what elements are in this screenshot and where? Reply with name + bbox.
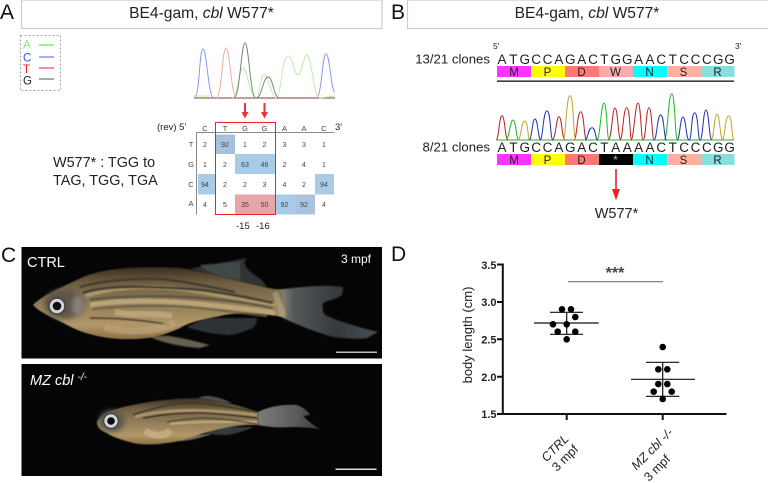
sequence: mutant clones: A [611,140,620,155]
chromatogram: panel A [194,43,335,98]
base editing table: 2 [223,162,227,169]
sequence: wild type clones: R [713,67,722,79]
base editing table: 35 [241,202,249,209]
sequence: mutant clones: P [544,155,552,167]
base editing table: 4 [203,202,207,209]
base editing table: G [242,124,248,133]
base editing table: 2 [223,182,227,189]
arrows: edited bases [242,103,268,118]
base editing table: T [189,140,194,149]
head and eye [99,410,125,432]
base editing table: 3 [263,182,267,189]
sequence: mutant clones: G [724,140,735,155]
label: MZ cbl -/-: -/- [78,372,88,383]
base editing table: 94 [320,182,328,189]
label B: B [391,1,405,24]
sequence: wild type clones: T [669,52,677,67]
sequence: wild type clones: G [611,52,621,67]
sequence: mutant clones: C [679,140,689,155]
sequence: mutant clones: A [645,140,655,155]
base editing table: A [301,124,307,133]
sequence: wild type clones: G [565,52,576,67]
sequence: mutant clones: C [656,140,666,155]
sequence: mutant clones: C [531,140,541,155]
base editing table: 3 [283,142,287,149]
base editing table: 46 [261,162,268,169]
sequence: mutant clones: A [554,140,563,155]
body [97,398,258,444]
sequence: wild type clones: C [656,52,666,67]
sequence: mutant clones: M [509,155,519,167]
y tick labels [481,260,496,421]
header: panel B [408,0,768,28]
sequence: wild type clones: A [645,52,655,67]
y axis title: body length (cm) [460,287,475,383]
axes [497,264,726,420]
base editing table: 1 [322,162,326,169]
stripes [133,403,257,435]
base editing table: 1 [203,162,207,169]
base editing table: 2 [243,182,247,189]
base editing table: 4 [283,182,287,189]
sequence: mutant clones: A [634,140,643,155]
header: panel A: BE4-gam, cbl W577* [129,5,274,22]
y tick labels: 3.5 [481,260,496,272]
sequence: mutant clones: C [691,140,701,155]
sequence: wild type clones: 5' [493,41,500,51]
sequence: wild type clones: C [702,52,712,67]
sequence: wild type clones: N [645,67,654,79]
x labels: 3 mpf [549,442,582,474]
sequence: wild type clones: A [554,52,563,67]
sequence: mutant clones: A [497,140,507,155]
base editing table: 63 [241,162,249,169]
y tick labels: 3.0 [481,297,496,309]
sequence: wild type clones: 3' [735,41,742,51]
sequence: mutant clones: S [680,155,688,167]
label D: D [391,243,406,266]
legend: base colours: G [23,76,32,88]
base editing table: 4 [322,202,326,209]
sequence: wild type clones: G [520,52,530,67]
sequence: wild type clones: 13/21 clones [415,52,490,66]
base editing table: 1 [322,142,326,149]
base editing table: 2 [263,142,267,149]
base editing table: A [282,124,287,133]
base editing table: 92 [281,202,288,209]
label: MZ cbl -/-: MZ cbl [30,373,74,389]
body [33,267,285,339]
label C: C [1,244,16,267]
sequence: wild type clones: D [577,67,586,79]
base editing table: 3' [335,122,342,133]
base editing table: 2 [203,142,207,149]
base editing table: 50 [261,202,268,209]
header: panel A [22,0,382,28]
legend: base colours: A [23,40,31,52]
sequence: mutant clones: G [713,140,723,155]
sequence: mutant clones: R [713,155,722,167]
legend: base colours [20,36,60,90]
base editing table: 2 [283,162,287,169]
base editing table: 92 [221,142,229,149]
arrow: stop codon [612,169,620,200]
legend: base colours: T [23,64,30,76]
stripes [80,279,283,331]
significance bar [568,265,663,282]
base editing table: C [188,180,194,189]
header: panel B: BE4-gam, cbl W577* [515,5,659,22]
sequence: mutant clones: G [565,140,576,155]
base editing table [157,122,342,232]
sequence: wild type clones: C [679,52,689,67]
base editing table: -15 [236,221,250,232]
base editing table: C [202,124,208,133]
sequence: wild type clones: G [724,52,735,67]
base editing table: G [262,124,268,133]
sequence: wild type clones: C [531,52,541,67]
sequence: mutant clones: T [669,140,677,155]
sequence: mutant clones: D [577,155,586,167]
base editing table: A [188,199,194,208]
sequence: mutant clones: N [645,155,654,167]
data: MZ cbl [631,344,695,402]
divider line [497,80,734,82]
sequence: wild type clones: T [509,52,518,67]
x labels [539,426,676,483]
legend: base colours: C [23,52,31,64]
sequence: mutant clones: * [613,155,618,167]
sequence: mutant clones [423,140,735,167]
label: 3 mpf: 3 mpf [341,252,372,266]
base editing table: 5 [223,202,227,209]
text: mutation description: W577* : TGG to [53,155,155,171]
head and eye [44,289,84,319]
scale bar: control [336,352,377,353]
base editing table: 4 [302,162,306,169]
base editing table: C [321,124,327,133]
x labels: CTRL [539,432,572,465]
base editing table: 3 [302,142,306,149]
sequence: mutant clones: G [520,140,530,155]
chromatogram: panel B [496,94,734,140]
sequence: wild type clones: A [497,52,507,67]
sequence: wild type clones: P [544,67,552,79]
sequence: wild type clones: G [622,52,632,67]
significance bar: *** [606,265,625,282]
photo: mutant fish [22,364,382,476]
label A: A [0,1,14,24]
data: CTRL [534,306,599,343]
sequence: mutant clones: C [543,140,553,155]
base editing table: -16 [256,221,270,232]
sequence: wild type clones: G [713,52,723,67]
y tick labels: 1.5 [481,409,496,421]
photo: control fish [22,247,382,358]
sequence: mutant clones: T [509,140,518,155]
chart: body length [460,260,726,483]
base editing table: T [223,124,228,133]
fins [178,396,320,441]
sequence: wild type clones: W [610,67,621,79]
sequence: wild type clones: C [691,52,701,67]
y tick labels: 2.0 [481,372,496,384]
base editing table: G [188,160,194,169]
sequence: wild type clones: S [680,67,688,79]
sequence: wild type clones: C [588,52,598,67]
label: CTRL: CTRL [27,255,65,271]
label: W577*: W577* [595,206,639,222]
x labels: MZ cbl -/- [629,426,676,473]
sequence: wild type clones: T [600,52,609,67]
sequence: wild type clones: M [509,67,519,79]
base editing table: 94 [201,182,209,189]
base editing table: (rev) 5' [157,122,186,133]
base editing table: 92 [300,202,308,209]
sequence: mutant clones: A [577,140,586,155]
sequence: wild type clones: A [577,52,586,67]
text: mutation description: TAG, TGG, TGA [53,173,158,189]
sequence: mutant clones: C [588,140,598,155]
base editing table: 2 [302,182,306,189]
base editing table: 1 [243,142,247,149]
sequence: wild type clones: A [634,52,643,67]
caudal and median fins [150,258,378,348]
sequence: mutant clones: 8/21 clones [423,140,490,154]
sequence: wild type clones [415,41,742,79]
sequence: mutant clones: C [702,140,712,155]
y tick labels: 2.5 [481,334,496,346]
sequence: wild type clones: C [543,52,553,67]
sequence: mutant clones: T [600,140,609,155]
scale bar: mutant [336,468,376,470]
sequence: mutant clones: A [623,140,632,155]
